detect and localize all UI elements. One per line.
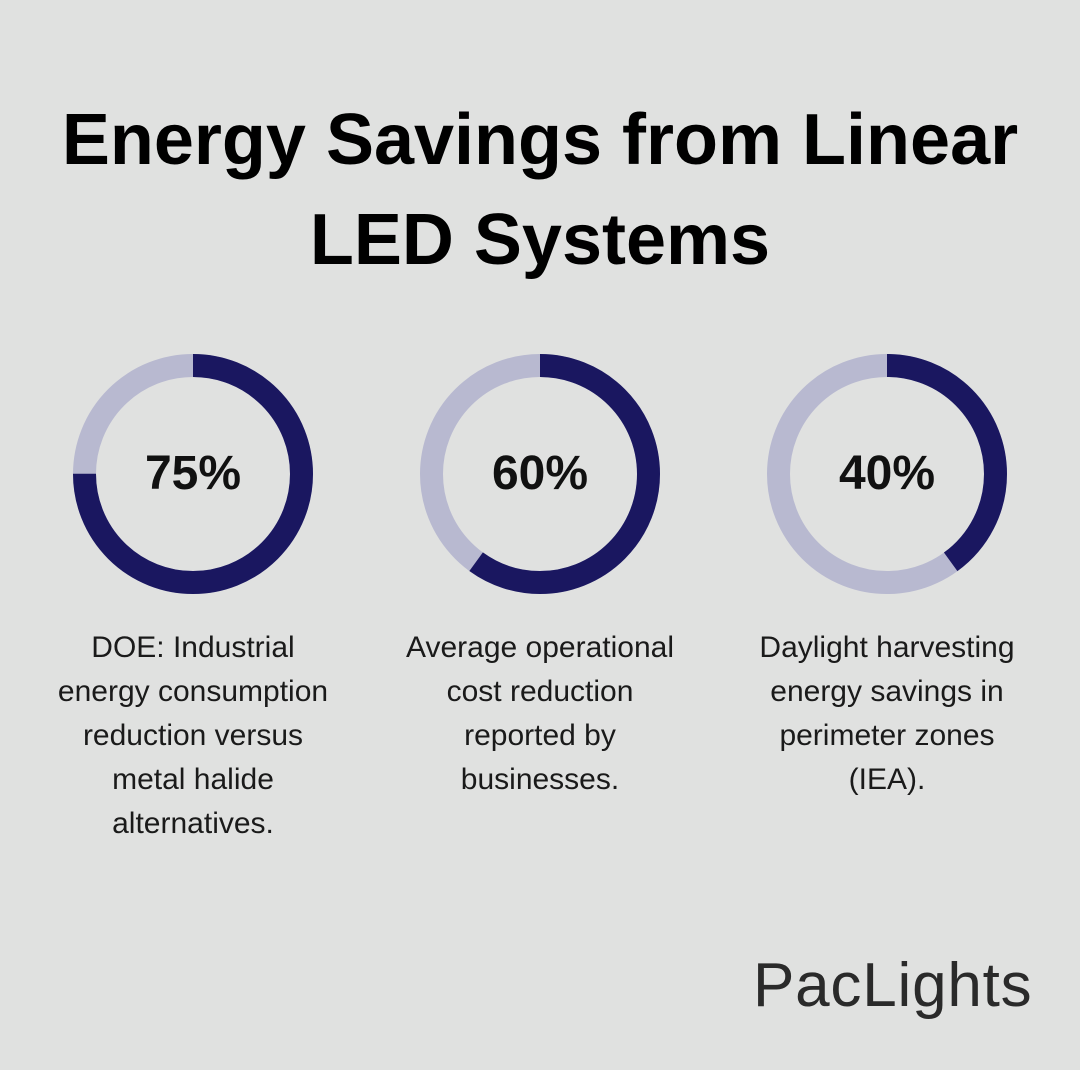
percentage 40%: 40%: [839, 447, 935, 500]
description: [58, 631, 328, 840]
description: reduction versus: [83, 719, 303, 752]
description: reported by: [464, 719, 616, 752]
logo: PacLights: [753, 951, 1032, 1020]
description: [406, 631, 674, 796]
percentage 60%: 60%: [492, 447, 588, 500]
description: perimeter zones: [779, 719, 995, 752]
description: businesses.: [461, 763, 619, 796]
panel: 60% stat: [406, 354, 674, 796]
description: cost reduction: [447, 675, 633, 708]
description: (IEA).: [849, 763, 925, 796]
description: energy consumption: [58, 675, 328, 708]
title: Energy Savings from Linear: [62, 100, 1018, 180]
description: alternatives.: [112, 807, 274, 840]
description: DOE: Industrial: [91, 631, 295, 664]
donut chart 60%: [420, 354, 660, 594]
title: [62, 100, 1018, 280]
panel: 40% stat: [759, 354, 1015, 796]
description: [759, 631, 1015, 796]
description: Daylight harvesting: [759, 631, 1015, 664]
title: LED Systems: [310, 200, 770, 280]
description: energy savings in: [770, 675, 1004, 708]
description: Average operational: [406, 631, 674, 664]
donut chart 75%: [73, 354, 313, 594]
description: metal halide: [112, 763, 274, 796]
panel: 75% stat: [58, 354, 328, 840]
percentage 75%: 75%: [145, 447, 241, 500]
donut chart 40%: [767, 354, 1007, 594]
